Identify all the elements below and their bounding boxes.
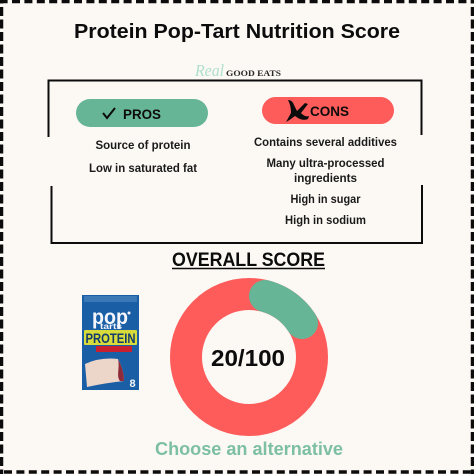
logo: Real Good Eats [194,61,281,80]
pros list: Source of protein [96,138,190,152]
pros list: Low in saturated fat [89,161,197,175]
icon: X mark [286,100,309,122]
cons list [254,135,397,227]
panel: cons [254,97,397,227]
pros list [89,138,197,175]
cons list: Contains several additives [254,135,397,149]
cons list: ingredients [294,171,357,185]
cons list: Many ultra-processed [266,156,384,170]
box logo: tarts [100,322,123,331]
chart: score donut [186,294,312,420]
score value: 20/100 [211,345,285,371]
box logo: pop [92,306,128,329]
icon: check mark [103,108,115,118]
logo: Real Good Eats: GOOD EATS [226,68,281,78]
cons label: CONS [310,104,349,119]
image: Pop-Tarts Protein box: 8 [129,378,136,390]
panel: pros and cons frame [48,80,422,243]
pros label: PROS [123,107,161,122]
pros badge [76,99,208,127]
image: Pop-Tarts Protein box: PROTEIN [86,331,136,346]
logo: Real Good Eats: Real [194,61,224,80]
verdict: Choose an alternative [155,439,343,459]
panel: pros [76,99,208,175]
image: Pop-Tarts Protein box [82,295,139,390]
cons list: High in sodium [285,213,366,227]
cons list: High in sugar [290,192,361,206]
cons badge [262,97,394,124]
title: Protein Pop-Tart Nutrition Score [74,20,400,43]
heading: overall score: OVERALL SCORE [172,250,325,271]
